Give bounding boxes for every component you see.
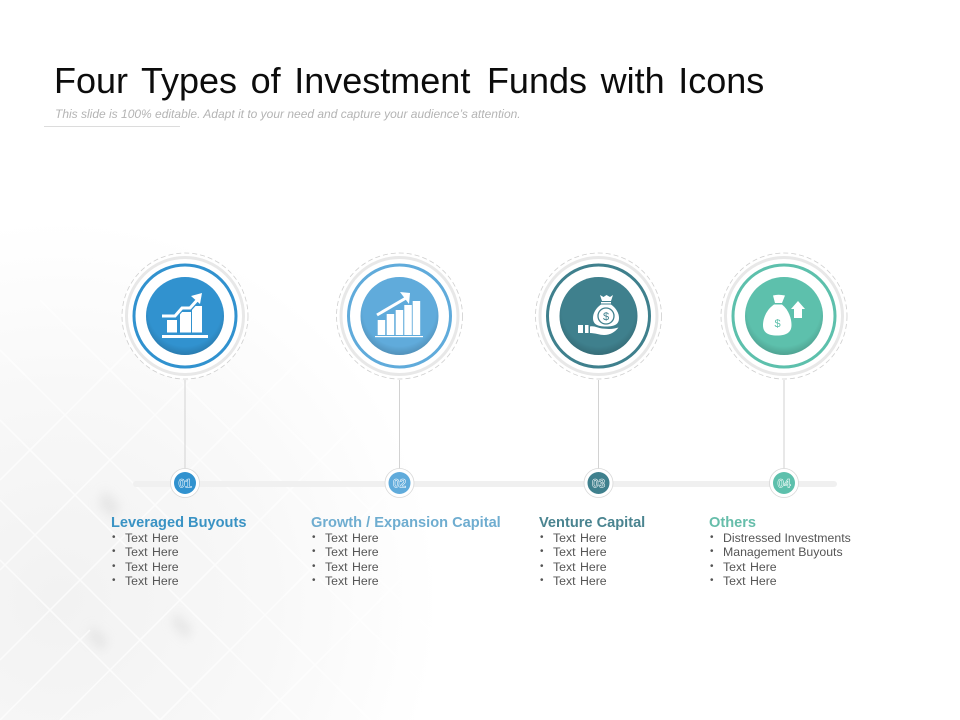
list: venture capital bbox=[540, 531, 607, 588]
list: leveraged buyouts bbox=[112, 531, 179, 588]
list: leveraged buyouts: Text Here bbox=[125, 574, 179, 588]
list: growth / expansion capital bbox=[312, 531, 379, 588]
list: venture capital: Text Here bbox=[553, 560, 607, 574]
list: others: Text Here bbox=[723, 560, 777, 574]
heading: growth / expansion capital: Growth / Expansion Capital bbox=[311, 514, 501, 530]
list: growth / expansion capital: Text Here bbox=[325, 560, 379, 574]
node 1: leveraged buyouts bbox=[122, 253, 248, 498]
heading: venture capital: Venture Capital bbox=[539, 514, 645, 530]
title underline bbox=[44, 126, 180, 127]
list: venture capital: Text Here bbox=[553, 531, 607, 545]
list: leveraged buyouts: Text Here bbox=[125, 545, 179, 559]
node 4: others bbox=[721, 253, 847, 498]
connector badge 01 bbox=[170, 468, 200, 498]
list: leveraged buyouts: Text Here bbox=[125, 531, 179, 545]
icon: rising bar chart bbox=[162, 293, 208, 338]
timeline bar bbox=[133, 481, 837, 487]
connector badge 01: 01 bbox=[178, 476, 192, 490]
heading: leveraged buyouts: Leveraged Buyouts bbox=[111, 514, 246, 530]
list: others: Management Buyouts bbox=[723, 545, 843, 559]
subtitle: This slide is 100% editable. Adapt it to your need and capture your audience’s attention. bbox=[55, 107, 521, 121]
list: venture capital: Text Here bbox=[553, 574, 607, 588]
icon: growth bars with arrow bbox=[375, 292, 423, 337]
connector badge 03: 03 bbox=[592, 476, 605, 490]
heading: others: Others bbox=[709, 514, 756, 530]
connector badge 04 bbox=[770, 468, 798, 498]
list: growth / expansion capital: Text Here bbox=[325, 531, 379, 545]
list: growth / expansion capital: Text Here bbox=[325, 574, 379, 588]
icon: money bag on hand bbox=[578, 295, 619, 335]
connector badge 04: 04 bbox=[777, 476, 791, 490]
icon: money bag with up arrow bbox=[763, 295, 805, 336]
node 3: venture capital bbox=[536, 253, 662, 498]
connector badge 02: 02 bbox=[393, 476, 406, 490]
list: others: Text Here bbox=[723, 574, 777, 588]
list: leveraged buyouts: Text Here bbox=[125, 560, 179, 574]
list: others: Distressed Investments bbox=[723, 531, 851, 545]
node 2: growth / expansion capital bbox=[336, 253, 462, 498]
list: growth / expansion capital: Text Here bbox=[325, 545, 379, 559]
list: others bbox=[710, 531, 851, 588]
icon: money bag with up arrow: $ bbox=[774, 318, 781, 330]
connector badge 03 bbox=[584, 468, 613, 498]
list: venture capital: Text Here bbox=[553, 545, 607, 559]
icon: money bag on hand: $ bbox=[603, 311, 609, 323]
title: Four Types of Investment Funds with Icons bbox=[54, 60, 764, 101]
connector badge 02 bbox=[385, 468, 414, 498]
